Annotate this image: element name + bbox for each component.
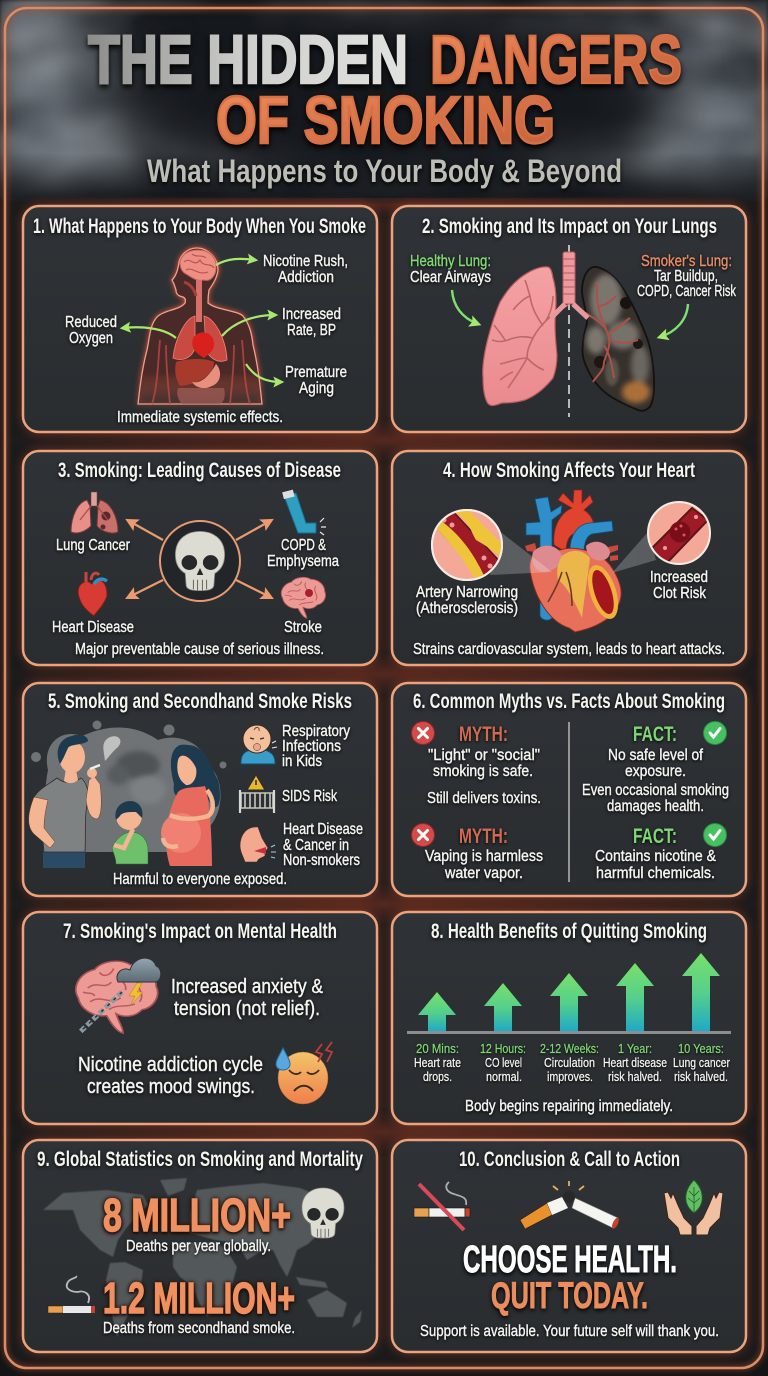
disease labels	[52, 537, 339, 636]
column divider	[568, 722, 570, 882]
effect labels: Aging	[299, 380, 334, 397]
addiction text: creates mood swings.	[87, 1076, 255, 1098]
panel 2 card	[392, 206, 746, 432]
panel 4: heart	[392, 451, 746, 665]
icon: no smoking	[414, 1182, 470, 1230]
disease labels: Stroke	[284, 619, 322, 636]
effect labels: Premature	[285, 364, 347, 381]
stat caption: secondhand: Deaths from secondhand smoke.	[103, 1320, 295, 1337]
timeline labels: Heart rate	[414, 1056, 461, 1070]
icon: heart	[78, 572, 107, 616]
panel 8 caption: Body begins repairing immediately.	[465, 1098, 673, 1115]
effect arrows	[123, 259, 281, 382]
timeline labels: 2-12 Weeks:	[540, 1042, 599, 1056]
timeline labels: risk halved.	[674, 1070, 728, 1084]
myth text: Vaping is harmless	[425, 848, 543, 865]
world map	[43, 1178, 362, 1337]
effect labels	[65, 253, 348, 397]
lung labels: Tar Buildup,	[654, 268, 718, 285]
risk labels: Heart Disease	[283, 821, 363, 838]
panel 5 heading: 5. Smoking and Secondhand Smoke Risks	[48, 690, 352, 713]
icon: brain with storm and chain	[76, 958, 161, 1033]
main title	[88, 21, 682, 158]
effect labels: Nicotine Rush,	[263, 253, 348, 270]
panel 9 card	[23, 1140, 377, 1352]
disease labels: Heart Disease	[52, 619, 134, 636]
icon: lung cancer	[71, 492, 118, 533]
risk labels: SIDS Risk	[282, 788, 337, 805]
panel 9: global statistics	[23, 1140, 377, 1352]
icon: coughing baby	[241, 725, 277, 764]
panel 4 card	[392, 451, 746, 665]
myth and fact headings: FACT:	[633, 825, 677, 848]
stat: 8 million: 8 MILLION+	[103, 1189, 291, 1241]
timeline labels: normal.	[486, 1070, 522, 1084]
timeline labels: CO level	[485, 1056, 522, 1070]
panel 3 caption: Major preventable cause of serious illness.	[75, 641, 324, 658]
panel 10 heading: 10. Conclusion & Call to Action	[459, 1148, 680, 1171]
myth text	[425, 747, 543, 882]
artery narrowing inset	[431, 509, 503, 581]
fact text: harmful chemicals.	[596, 865, 715, 882]
myth and fact headings: MYTH:	[459, 723, 508, 746]
family in smoke cloud	[29, 720, 227, 868]
panel 1: body effects	[23, 206, 377, 432]
main title: OF SMOKING	[216, 83, 555, 158]
icon: stressed face	[276, 1042, 332, 1104]
anxiety text: Increased anxiety &	[171, 976, 324, 998]
icon: smoking cigarette	[48, 1276, 95, 1313]
trachea	[551, 252, 588, 318]
timeline labels	[414, 1042, 730, 1084]
panel 1 caption: Immediate systemic effects.	[117, 409, 283, 426]
panel 10 card	[392, 1140, 746, 1352]
panel 8 card	[392, 912, 746, 1124]
dashed divider	[568, 245, 570, 417]
risk labels: & Cancer in	[283, 837, 349, 854]
disease labels: Emphysema	[267, 553, 339, 570]
myth text: smoking is safe.	[433, 763, 533, 780]
panel 6: myths and facts	[392, 683, 746, 896]
timeline labels: 12 Hours:	[480, 1042, 526, 1056]
panel 9 heading: 9. Global Statistics on Smoking and Mortality	[37, 1148, 363, 1171]
timeline labels: drops.	[423, 1070, 452, 1084]
myth and fact headings: FACT:	[633, 723, 677, 746]
timeline labels: 10 Years:	[678, 1042, 724, 1056]
disease labels: Lung Cancer	[56, 537, 130, 554]
lung labels	[410, 253, 736, 300]
icon: hands with leaf	[664, 1180, 723, 1235]
subtitle: What Happens to Your Body & Beyond	[147, 153, 622, 189]
myth text: Still delivers toxins.	[427, 790, 541, 807]
risk labels	[282, 723, 363, 869]
stat caption: globally: Deaths per year globally.	[126, 1238, 271, 1255]
timeline labels: Heart disease	[603, 1056, 667, 1070]
effect labels: Rate, BP	[287, 322, 336, 339]
myth text: water vapor.	[444, 865, 523, 882]
effect labels: Increased	[282, 306, 341, 323]
myth and fact headings	[459, 723, 677, 848]
body illustration with organs	[138, 248, 262, 404]
anxiety text: tension (not relief).	[174, 998, 320, 1020]
panel 8: quitting benefits	[392, 912, 746, 1124]
icon: warning crib	[240, 775, 274, 813]
lung arrows	[452, 290, 688, 337]
heart labels: (Atherosclerosis)	[416, 600, 518, 617]
central skull	[160, 521, 240, 601]
risk labels: in Kids	[282, 753, 322, 770]
lung labels: Healthy Lung:	[410, 253, 491, 270]
fact text	[582, 747, 729, 882]
timeline labels: Circulation	[544, 1056, 595, 1070]
heart labels: Artery Narrowing	[416, 584, 518, 601]
panel 3: diseases	[23, 451, 377, 665]
panel 3 heading: 3. Smoking: Leading Causes of Disease	[58, 459, 341, 482]
anxiety text	[171, 976, 324, 1020]
effect labels: Oxygen	[69, 330, 113, 347]
icon: skull	[302, 1188, 344, 1238]
healthy lung	[483, 267, 568, 406]
stat: 1.2 million: 1.2 MILLION+	[103, 1274, 295, 1323]
icon: brain	[281, 577, 326, 618]
call to action: quit today: QUIT TODAY.	[491, 1275, 648, 1316]
timeline arrow chart	[407, 953, 731, 1034]
addiction text	[78, 1054, 263, 1098]
panel 2: lungs	[392, 206, 746, 432]
panel 7: mental health	[23, 912, 377, 1124]
timeline labels: risk halved.	[608, 1070, 662, 1084]
clot risk inset	[648, 502, 710, 566]
panel 5: secondhand smoke	[23, 683, 377, 896]
myth and fact headings: MYTH:	[459, 825, 508, 848]
main title: DANGERS	[430, 21, 682, 98]
effect labels: Addiction	[278, 269, 334, 286]
lung labels: Smoker's Lung:	[641, 253, 732, 270]
lung labels: Clear Airways	[410, 269, 491, 286]
risk labels: Respiratory	[282, 723, 350, 740]
panel 1 card	[23, 206, 377, 432]
icon: broken cigarette	[520, 1181, 620, 1230]
disease arrows	[129, 521, 270, 597]
fact text: exposure.	[625, 763, 686, 780]
fact text: damages health.	[607, 798, 704, 815]
heart labels: Clot Risk	[653, 585, 706, 602]
main title: THE HIDDEN	[88, 21, 408, 98]
fact text: Contains nicotine &	[595, 848, 717, 865]
panel 3 card	[23, 451, 377, 665]
heart labels: Increased	[650, 569, 708, 586]
risk labels: Non-smokers	[283, 852, 360, 869]
anatomical heart	[525, 490, 624, 632]
panel 5 card	[23, 683, 377, 896]
fact badges	[704, 722, 726, 846]
panel 7 heading: 7. Smoking's Impact on Mental Health	[63, 920, 337, 943]
panel 10 caption: Support is available. Your future self will thank you.	[420, 1323, 719, 1340]
myth badges	[412, 722, 434, 846]
disease labels: COPD &	[281, 537, 326, 554]
addiction text: Nicotine addiction cycle	[78, 1054, 263, 1076]
myth text: "Light" or "social"	[428, 747, 540, 764]
fact text: No safe level of	[608, 747, 704, 764]
heart labels	[416, 569, 708, 617]
smoker's lung	[574, 267, 654, 411]
smoke texture behind title	[0, 0, 768, 215]
fact text: Even occasional smoking	[582, 782, 729, 799]
timeline labels: 20 Mins:	[416, 1042, 459, 1056]
panel 7 card	[23, 912, 377, 1124]
panel 6 card	[392, 683, 746, 896]
icon: inhaler	[282, 490, 326, 535]
panel 5 caption: Harmful to everyone exposed.	[113, 871, 287, 888]
risk labels: Infections	[282, 738, 341, 755]
icon: sick head	[240, 827, 276, 862]
magnifier beams	[490, 530, 656, 575]
timeline labels: Lung cancer	[673, 1056, 730, 1070]
panel 10: conclusion	[392, 1140, 746, 1352]
timeline labels: improves.	[547, 1070, 593, 1084]
effect labels: Reduced	[65, 314, 117, 331]
timeline labels: 1 Year:	[618, 1042, 652, 1056]
panel 1 heading: 1. What Happens to Your Body When You Smoke	[33, 215, 366, 238]
